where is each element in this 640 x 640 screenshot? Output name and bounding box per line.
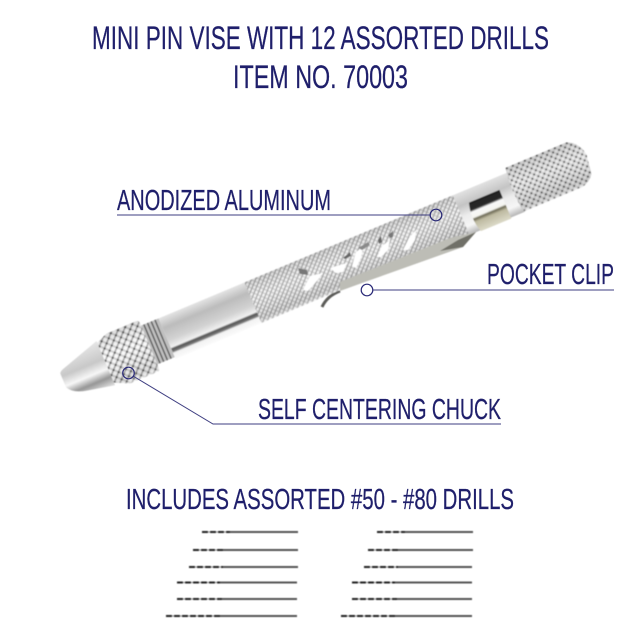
chrome band and brass ring — [467, 190, 511, 232]
chuck knurl — [95, 320, 160, 389]
title — [92, 20, 549, 95]
pin vise tool photo — [53, 136, 600, 407]
chuck nose — [54, 341, 115, 403]
end cap — [504, 137, 598, 212]
callout: pocket clip — [361, 259, 614, 296]
engraved logo — [298, 230, 416, 291]
drills: right set — [341, 532, 473, 616]
threaded collar — [141, 318, 175, 364]
drills: left set — [166, 532, 298, 616]
title: ITEM NO. 70003 — [233, 59, 408, 95]
callout: anodized aluminum: ANODIZED ALUMINUM — [117, 185, 331, 217]
pocket clip hook — [322, 291, 340, 307]
pocket clip body — [340, 232, 476, 291]
sleeve — [453, 172, 525, 235]
callout: self centering chuck: SELF CENTERING CHUCK — [258, 394, 501, 426]
handle knurled section — [244, 195, 470, 323]
callout: self centering chuck — [123, 367, 501, 426]
handle smooth section — [159, 280, 268, 359]
